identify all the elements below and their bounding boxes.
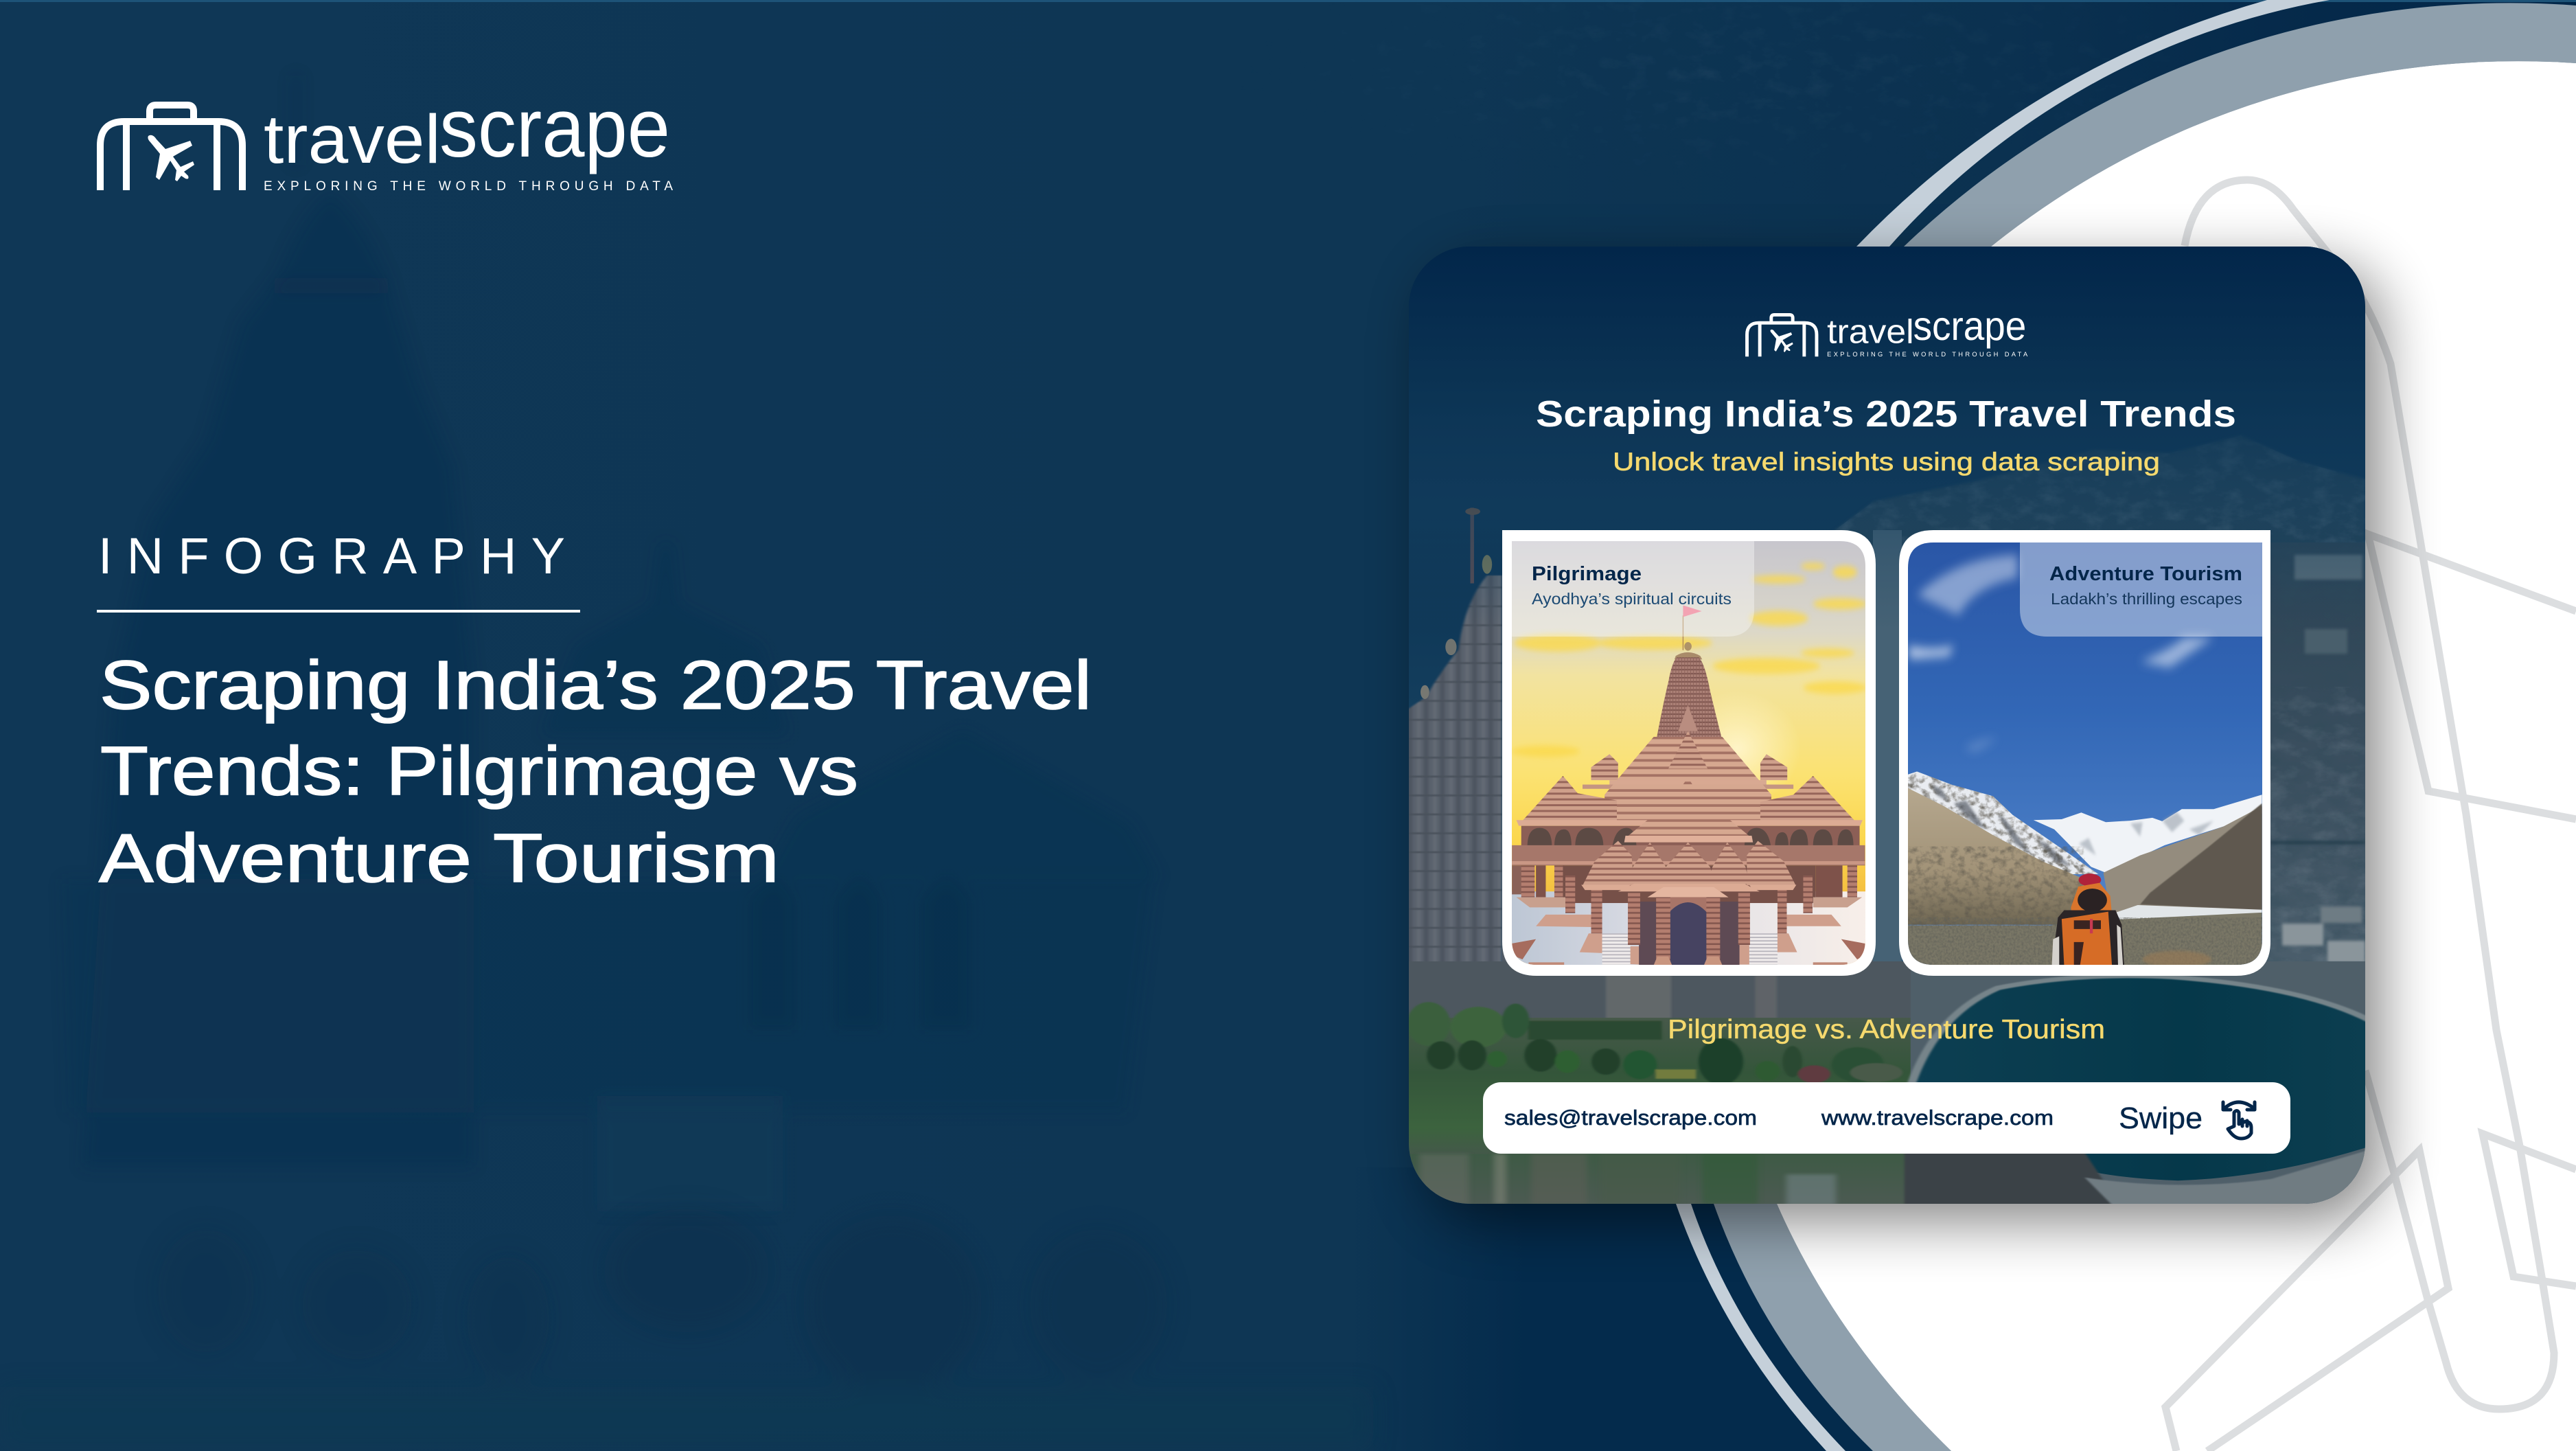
wordmark: scrape <box>1913 303 2026 349</box>
frozen river <box>2115 905 2262 920</box>
label title: Pilgrimage <box>1532 563 1642 585</box>
front columns and portal <box>1668 902 1707 966</box>
label subtitle: Ladakh’s thrilling escapes <box>2051 590 2242 608</box>
eyebrow: INFOGRAPHY: INFOGRAPHY <box>98 527 565 584</box>
wordmark: travel <box>1827 314 1914 351</box>
background: faint garden trees <box>0 1209 1373 1451</box>
card logo <box>1747 303 2028 358</box>
website: www.travelscrape.com <box>1821 1106 2054 1130</box>
plinths <box>1536 915 1841 965</box>
plane icon <box>148 135 194 181</box>
watermark: plane outline <box>2165 180 2576 1451</box>
suitcase icon <box>1747 315 1817 356</box>
decorative arcs: grey band <box>1714 3 2576 1451</box>
decorative arcs: light band <box>1676 0 2330 1451</box>
right tail <box>2483 1134 2576 1286</box>
wordmark: travel <box>264 101 441 178</box>
logo: travelscrape <box>100 81 673 194</box>
plane body <box>2185 180 2554 1409</box>
suitcase icon <box>100 105 242 190</box>
rocky ground <box>1908 913 2262 968</box>
collage: dark fade from the top <box>1409 247 2365 631</box>
wordmark: scrape <box>439 81 670 174</box>
panel: promotional card <box>1401 247 2371 1217</box>
collage: distant mountain <box>1835 438 2365 548</box>
email: sales@travelscrape.com <box>1504 1106 1757 1130</box>
front mini roofs <box>1629 843 1668 884</box>
side gate pavilions <box>1583 841 1634 886</box>
plane icon <box>1771 330 1793 352</box>
background: faint temple silhouette <box>62 76 1160 1211</box>
front pyramid <box>1625 777 1751 838</box>
card collage background <box>1401 247 2371 1217</box>
snow peaks centre <box>2034 795 2262 873</box>
right wing <box>2368 534 2576 819</box>
white frame <box>1502 530 1876 976</box>
collage: lower scene with wall, garden and lake <box>1401 961 2371 1217</box>
panel: adventure image card <box>1899 530 2270 976</box>
divider line <box>97 610 580 613</box>
upper arcade <box>1521 826 1860 852</box>
steps <box>1602 911 1778 966</box>
main title: Scraping India’s 2025 Travel <box>100 647 1092 724</box>
side turrets <box>1591 754 1787 780</box>
left wing <box>2165 1150 2448 1451</box>
wordmark <box>1827 303 2026 351</box>
left brown slope <box>1908 788 2086 925</box>
card shadow <box>1425 264 2381 1222</box>
card subheading: Unlock travel insights using data scraping <box>1613 448 2160 476</box>
icon: swipe hand <box>2223 1102 2255 1139</box>
mountain photo illustration <box>1905 540 2265 968</box>
collage: gap behind cards <box>1873 530 1902 976</box>
tagline: EXPLORING THE WORLD THROUGH DATA <box>264 179 673 194</box>
frosted label <box>1512 541 1754 637</box>
main title <box>99 647 1092 897</box>
white frame <box>1899 530 2270 976</box>
collage: right hillside town <box>2266 542 2365 961</box>
panel: pilgrimage image card <box>1502 530 1876 976</box>
label title: Adventure Tourism <box>2049 563 2242 585</box>
frosted label <box>2020 542 2262 637</box>
main spire <box>1657 657 1722 738</box>
upper pyramid <box>1605 737 1771 821</box>
ground corner details <box>1512 939 1865 959</box>
lower arcade <box>1512 865 1862 907</box>
flag <box>1675 606 1702 659</box>
card heading: Scraping India’s 2025 Travel Trends <box>1536 393 2236 435</box>
swipe label: Swipe <box>2119 1101 2203 1135</box>
tagline: EXPLORING THE WORLD THROUGH DATA <box>1827 351 2028 358</box>
main title: Trends: Pilgrimage vs <box>100 733 858 810</box>
right slopes <box>2104 806 2262 913</box>
white circle area <box>1777 61 2576 1451</box>
middle band <box>1512 845 1865 865</box>
snow ridge left <box>1908 772 2098 874</box>
collage: left temple towers <box>1407 507 1900 990</box>
main title: Adventure Tourism <box>99 820 779 897</box>
label subtitle: Ayodhya’s spiritual circuits <box>1532 590 1732 608</box>
comparison caption: Pilgrimage vs. Adventure Tourism <box>1668 1015 2105 1044</box>
wordmark <box>264 81 670 178</box>
hiker with backpack <box>2052 873 2124 966</box>
side pavilions <box>1522 776 1617 821</box>
contact bar <box>1483 1082 2290 1154</box>
temple illustration <box>1509 538 1870 968</box>
